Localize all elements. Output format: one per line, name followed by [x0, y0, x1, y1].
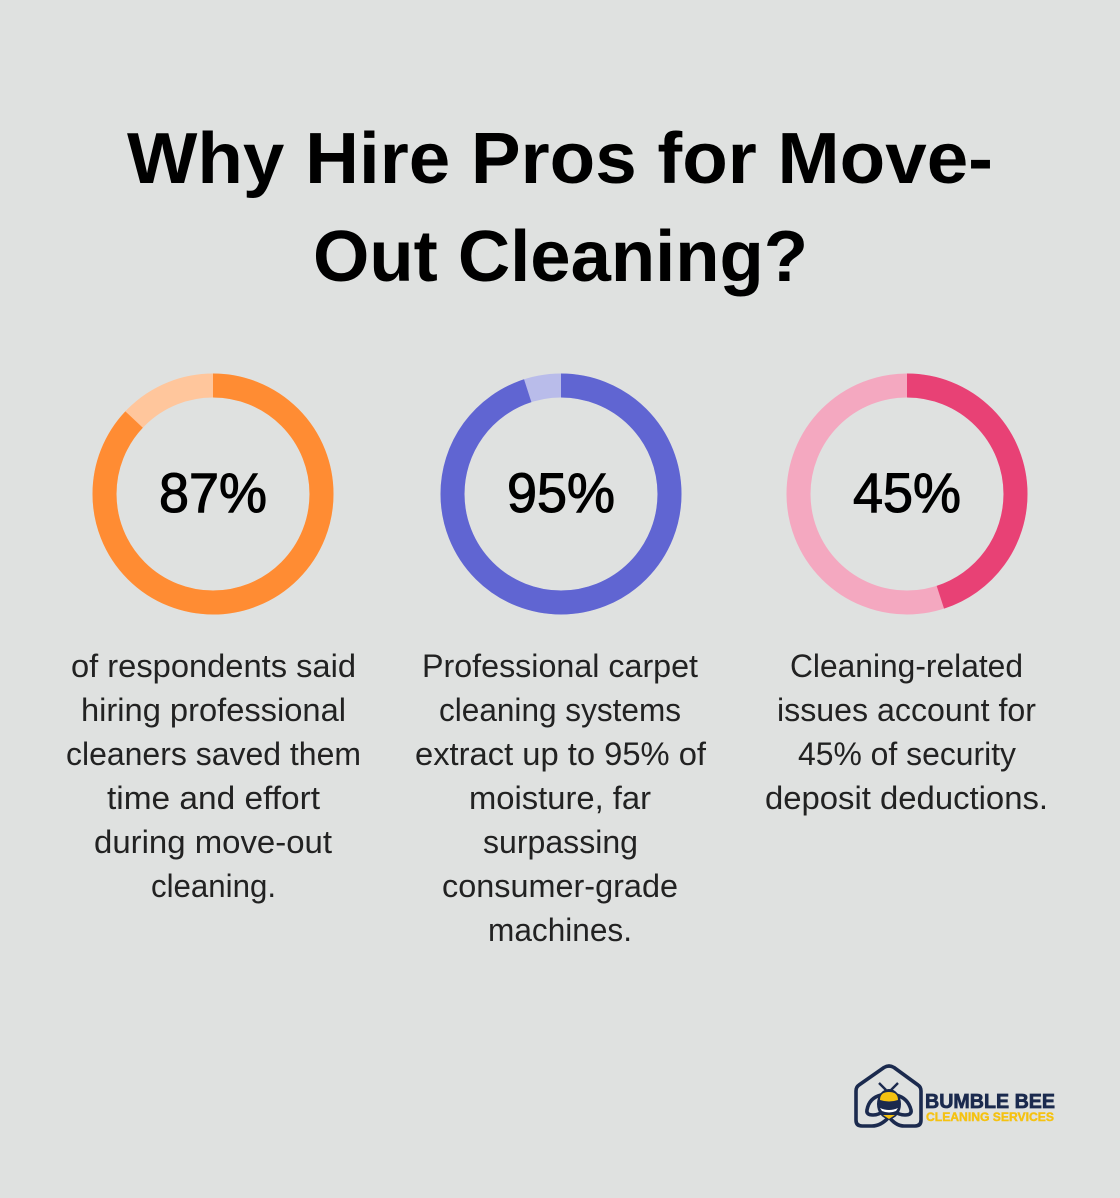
stat value: 87%: 87% — [159, 461, 267, 524]
icon: house with bee — [856, 1066, 921, 1126]
description: 95%: cleaning systems — [439, 692, 681, 728]
description: 95%: Professional carpet — [422, 648, 698, 684]
description: 87%: during move-out — [94, 824, 332, 860]
donut chart: 95% — [452, 386, 670, 602]
donut chart: 45% — [798, 386, 1016, 602]
description: 45%: Cleaning-related — [790, 648, 1023, 684]
description: 45%: 45% of security — [798, 736, 1016, 772]
description: 95% — [415, 648, 706, 948]
panel: 87% stat — [66, 386, 361, 904]
panel: 45% stat — [765, 386, 1048, 816]
description: 87%: cleaners saved them — [66, 736, 361, 772]
description: 45%: issues account for — [777, 692, 1036, 728]
title: Why Hire Pros for Move- — [127, 119, 993, 199]
description: 95%: moisture, far — [469, 780, 651, 816]
description: 87%: hiring professional — [81, 692, 346, 728]
description: 45%: deposit deductions. — [765, 780, 1048, 816]
description: 87% — [66, 648, 361, 904]
donut chart: 87% — [104, 386, 322, 602]
description: 87%: time and effort — [107, 780, 320, 816]
description: 45% — [765, 648, 1048, 816]
description: 95%: consumer-grade — [442, 868, 678, 904]
stat value: 45%: 45% — [853, 461, 961, 524]
description: 95%: machines. — [488, 912, 632, 948]
logo: Bumble Bee Cleaning Services — [856, 1066, 1055, 1126]
description: 87%: of respondents said — [71, 648, 356, 684]
logo tagline: CLEANING SERVICES — [926, 1112, 1054, 1124]
description: 95%: surpassing — [483, 824, 638, 860]
description: 95%: extract up to 95% of — [415, 736, 706, 772]
title — [127, 119, 993, 297]
stat value: 95%: 95% — [507, 461, 615, 524]
description: 87%: cleaning. — [151, 868, 276, 904]
logo wordmark: BUMBLE BEE — [925, 1091, 1055, 1113]
panel: 95% stat — [415, 386, 706, 948]
title: Out Cleaning? — [313, 217, 808, 297]
